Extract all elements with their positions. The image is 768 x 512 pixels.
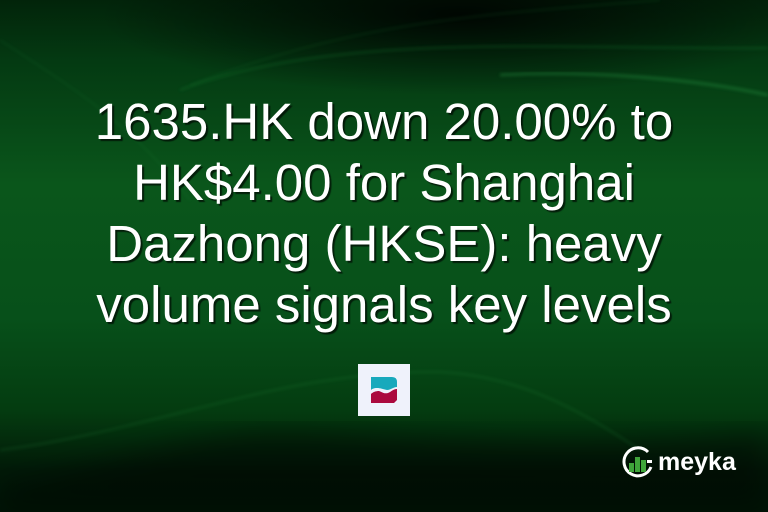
title: Dazhong (HKSE): heavy (106, 215, 662, 272)
icon: meyka circle with bars (622, 446, 652, 478)
icon: company logo tile (358, 364, 410, 416)
wordmark: meyka (658, 448, 736, 476)
title: 1635.HK down 20.00% to (95, 93, 673, 150)
title (95, 93, 674, 335)
logo: meyka (622, 446, 736, 478)
title: HK$4.00 for Shanghai (133, 154, 635, 211)
title: volume signals key levels (96, 276, 672, 333)
